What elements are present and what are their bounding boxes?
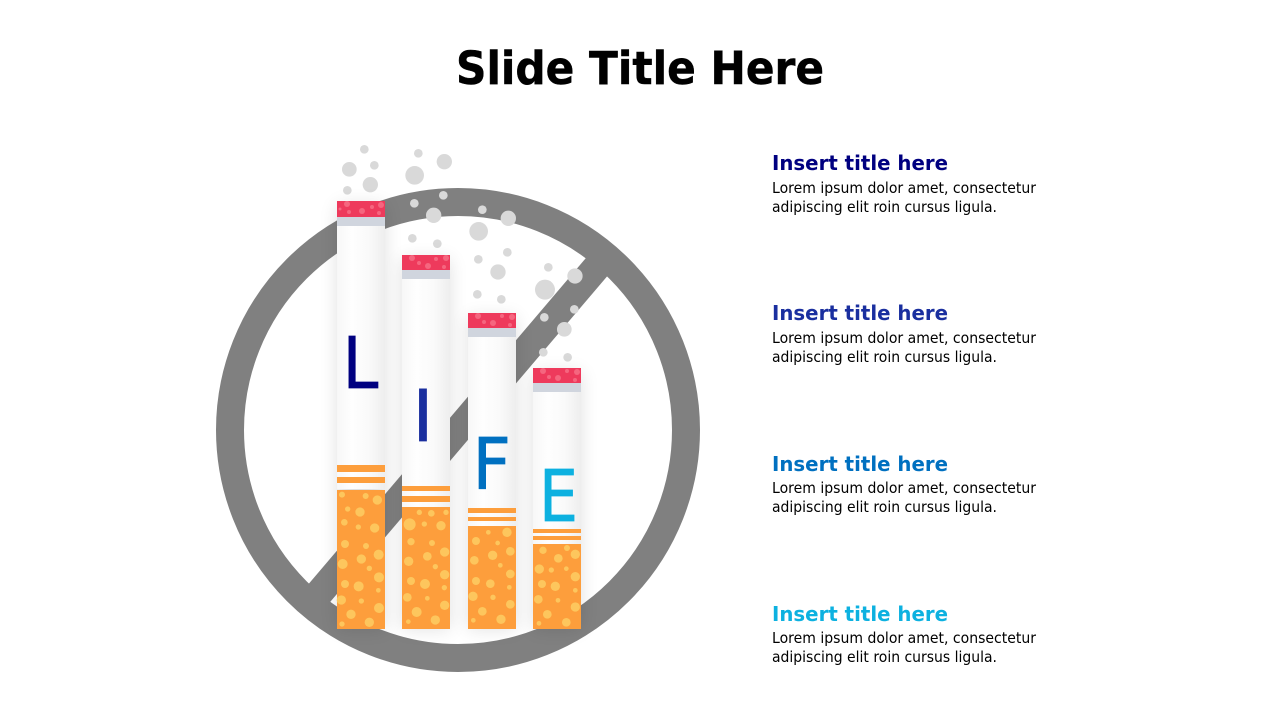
icon: prohibition sign	[230, 202, 686, 658]
text block 2: adipiscing elit roin cursus ligula.	[772, 348, 997, 366]
text block 1	[772, 151, 1037, 216]
cigarette L	[337, 201, 385, 629]
text block 2	[772, 301, 1037, 366]
icon: smoke bubbles	[342, 145, 583, 362]
cigarette I	[402, 255, 450, 629]
text block 3: adipiscing elit roin cursus ligula.	[772, 498, 997, 516]
text block 1: Insert title here	[772, 151, 948, 175]
text block 3	[772, 452, 1037, 516]
text block 3: Lorem ipsum dolor amet, consectetur	[772, 479, 1037, 497]
text block 4	[772, 602, 1037, 666]
cigarette E: E	[539, 455, 578, 538]
cigarette L: L	[343, 322, 379, 405]
text block 3: Insert title here	[772, 452, 948, 476]
text block 2: Lorem ipsum dolor amet, consectetur	[772, 329, 1037, 347]
text block 1: adipiscing elit roin cursus ligula.	[772, 198, 997, 216]
text block 4: adipiscing elit roin cursus ligula.	[772, 648, 997, 666]
cigarette F: F	[472, 423, 511, 506]
text block 1: Lorem ipsum dolor amet, consectetur	[772, 179, 1037, 197]
text block 4: Insert title here	[772, 602, 948, 626]
title: Slide Title Here	[456, 42, 824, 95]
cigarette E	[533, 368, 581, 629]
cigarette F	[468, 313, 516, 629]
cigarette I: I	[413, 375, 433, 458]
text block 4: Lorem ipsum dolor amet, consectetur	[772, 629, 1037, 647]
text block 2: Insert title here	[772, 301, 948, 325]
